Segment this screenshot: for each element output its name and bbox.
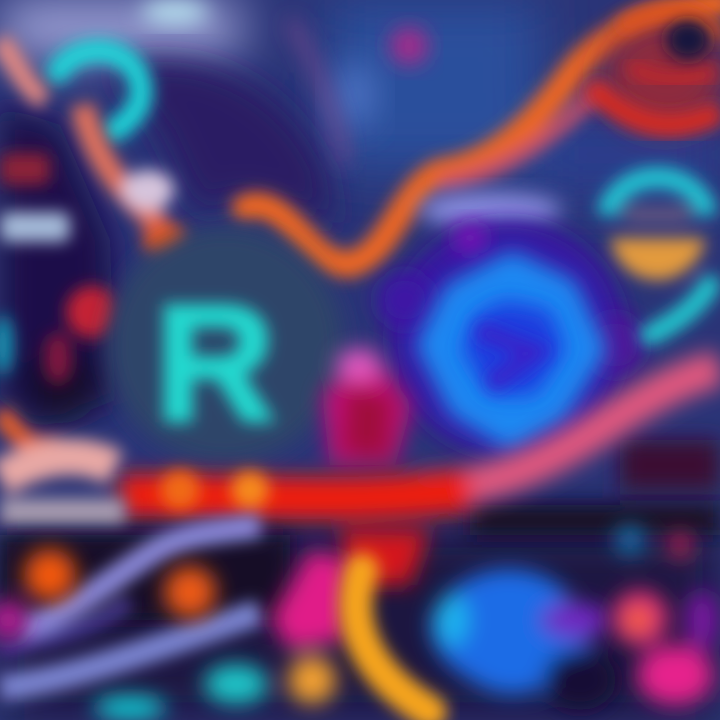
lavender ribbon bottom left [0, 525, 260, 688]
lavender glow above gear [418, 192, 562, 228]
icon: dark circular R badge [107, 227, 343, 463]
left salmon wave [0, 412, 125, 526]
letter R: R [155, 271, 275, 455]
orange wave across the top [245, 3, 720, 264]
red and pink ribbon across the middle [120, 368, 720, 585]
top accent glows [141, 0, 428, 165]
yellow swoosh at bottom centre [356, 570, 430, 712]
icon: blue gear badge [377, 220, 645, 456]
orange and magenta bottom dots [0, 549, 350, 720]
magenta cluster bottom right [612, 525, 718, 705]
top right red swirl with dark eye [590, 11, 720, 130]
icon: cyan ring top left [58, 51, 141, 130]
icon: blue blob bottom right [430, 569, 616, 710]
magenta gem in centre [322, 345, 412, 465]
left edge text glows [0, 153, 118, 384]
icon: cyan and gold badge right [606, 178, 710, 335]
dark purple swoosh [0, 61, 335, 430]
salmon ribbon top left [0, 40, 187, 258]
dark bottom band [0, 535, 290, 620]
dark band under right ribbon [470, 440, 720, 535]
orange dots on ribbon [160, 470, 269, 510]
